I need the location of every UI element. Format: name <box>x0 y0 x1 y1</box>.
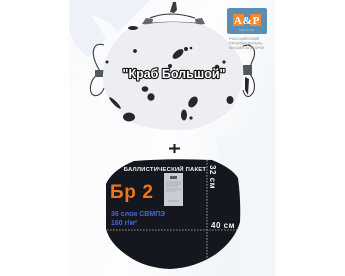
dashed measurement lines <box>107 160 238 262</box>
material specification <box>111 211 165 227</box>
logo: A&P Group: A&P <box>234 15 260 27</box>
top handle strap <box>142 2 205 25</box>
document label <box>164 173 183 206</box>
class label: Бр 2 <box>110 182 154 203</box>
package body <box>106 159 240 269</box>
material specification: 36 слоя СВМПЭ <box>111 211 165 218</box>
logo: A&P Group: ВЫСШЕЙ КАТЕГОРИИ <box>229 45 264 50</box>
dimension: height: 32 см <box>208 165 217 189</box>
material specification: 160 г/м² <box>111 220 138 227</box>
label: "Краб Большой" <box>123 67 226 81</box>
logo: A&P Group: GROUP <box>239 28 255 32</box>
ballistic package <box>106 159 240 269</box>
camouflage spots <box>106 26 249 122</box>
logo: A&P Group: РОССИЙСКИЙ <box>229 36 259 41</box>
heading: БАЛЛИСТИЧЕСКИЙ ПАКЕТ <box>124 165 206 173</box>
background panel <box>69 0 275 276</box>
left side strap <box>90 44 105 96</box>
vest: Краб Большой <box>90 2 255 130</box>
plus sign <box>169 144 180 153</box>
logo: A&P Group: ПРОИЗВОДИТЕЛЬ <box>229 40 263 46</box>
dimension: width: 40 см <box>211 221 235 230</box>
vest body <box>103 22 243 130</box>
logo: A&P Group <box>227 8 267 50</box>
right side strap <box>243 45 255 97</box>
